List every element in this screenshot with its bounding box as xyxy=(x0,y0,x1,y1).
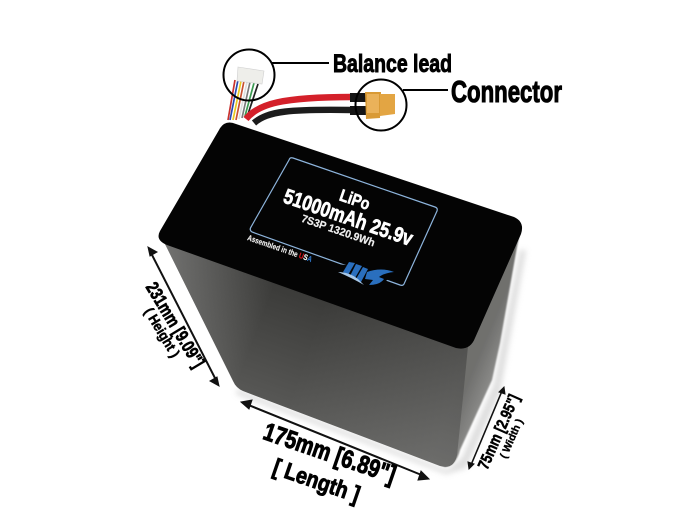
width arrow xyxy=(468,387,505,469)
height dimension xyxy=(141,247,219,386)
XT connector xyxy=(350,92,395,119)
balance lead callout xyxy=(224,50,452,100)
label capacity and voltage: 51000mAh 25.9v xyxy=(281,185,416,251)
maker logo xyxy=(336,262,394,287)
shadow under battery xyxy=(236,250,526,474)
balance lead xyxy=(228,67,264,120)
assembled in the USA: Assembled in the USA xyxy=(246,233,314,264)
black wire xyxy=(254,110,352,123)
text: Balance lead xyxy=(333,50,452,78)
balance plug xyxy=(237,67,264,84)
length value: 175mm [6.89"] xyxy=(260,418,399,489)
red wire xyxy=(246,97,352,119)
leader line xyxy=(272,62,329,64)
width caption: ( Width ) xyxy=(498,417,526,460)
height arrow xyxy=(148,247,219,386)
battery top face xyxy=(159,122,522,349)
connector callout xyxy=(356,74,562,130)
length caption: [ Length ] xyxy=(270,453,363,507)
power wires xyxy=(246,97,352,123)
label panel xyxy=(246,158,437,287)
balance wires xyxy=(228,80,258,120)
battery right side face xyxy=(444,232,520,467)
label title: LiPo xyxy=(337,186,373,214)
width value: 75mm [2.95"] xyxy=(475,392,523,472)
label configuration: 7S3P 1320.9Wh xyxy=(300,213,377,249)
battery front face xyxy=(162,238,468,467)
circle xyxy=(224,50,274,100)
circle xyxy=(356,80,406,130)
height caption: ( Height ) xyxy=(141,305,183,360)
height value: 231mm [9.09"] xyxy=(142,279,208,371)
label outline xyxy=(250,158,437,285)
text: Connector xyxy=(451,74,562,109)
length dimension xyxy=(241,400,429,507)
length arrow xyxy=(241,400,429,480)
width dimension xyxy=(468,387,526,472)
leader line xyxy=(403,89,448,91)
